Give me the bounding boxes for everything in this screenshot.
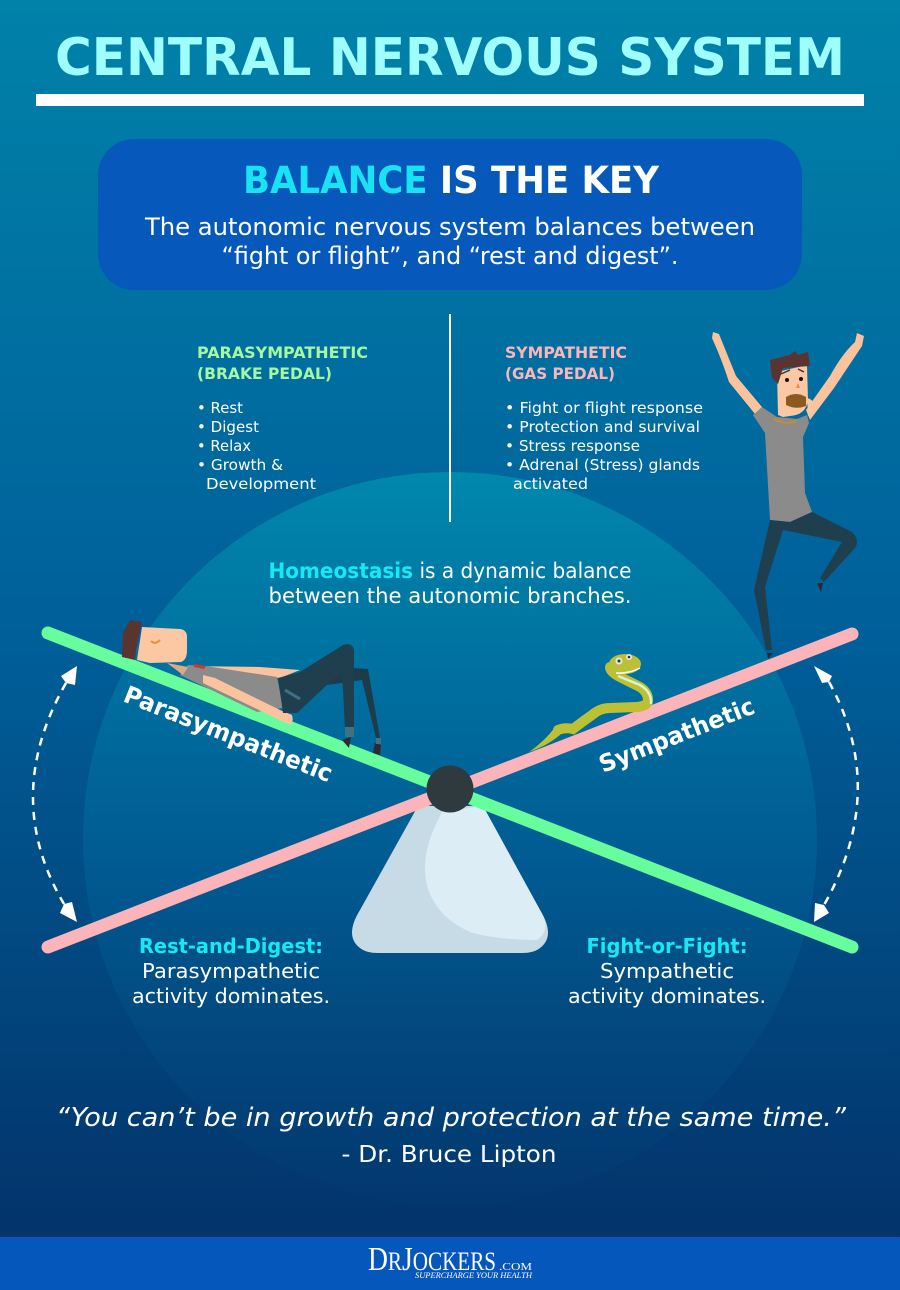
- sympathetic items: • Stress response: [505, 437, 640, 455]
- seesaw pivot: [426, 766, 474, 812]
- sympathetic items: activated: [513, 475, 588, 493]
- panel: balance is the key: [98, 139, 802, 290]
- caption: fight or fight: Sympathetic: [600, 959, 734, 983]
- sympathetic items: [505, 399, 703, 493]
- sympathetic items: • Protection and survival: [505, 418, 700, 436]
- panel text: “fight or flight”, and “rest and digest”.: [222, 242, 678, 270]
- beam: green parasympathetic: [48, 633, 852, 947]
- icon: snake: [529, 654, 651, 752]
- sympathetic heading: [505, 343, 627, 383]
- beam: pink sympathetic: [48, 634, 852, 947]
- center divider: [449, 314, 451, 522]
- sympathetic heading: SYMPATHETIC: [505, 343, 627, 362]
- sympathetic items: • Fight or flight response: [505, 399, 703, 417]
- parasympathetic items: • Digest: [197, 418, 259, 436]
- caption: rest and digest: Parasympathetic: [142, 959, 320, 983]
- homeostasis text: [268, 559, 632, 609]
- title underline: [36, 94, 864, 106]
- icon: scared man: [712, 332, 864, 659]
- beam label: sympathetic: Sympathetic: [595, 692, 759, 779]
- footer logo: .COM: [499, 1261, 532, 1273]
- parasympathetic items: • Rest: [197, 399, 243, 417]
- background circle: [83, 472, 817, 1206]
- parasympathetic items: Development: [206, 475, 316, 493]
- parasympathetic list: [197, 343, 368, 493]
- homeostasis text: Homeostasis is a dynamic balance: [268, 559, 632, 584]
- panel heading: BALANCE IS THE KEY: [243, 159, 660, 202]
- caption: fight or fight: activity dominates.: [568, 984, 766, 1008]
- panel text: The autonomic nervous system balances between: [144, 213, 755, 241]
- parasympathetic heading: PARASYMPATHETIC: [197, 343, 368, 362]
- sympathetic list: [505, 343, 703, 493]
- caption: rest and digest: [132, 934, 330, 1008]
- parasympathetic heading: [197, 343, 368, 383]
- sympathetic items: • Adrenal (Stress) glands: [505, 456, 700, 474]
- parasympathetic items: • Growth &: [197, 456, 283, 474]
- sympathetic heading: (GAS PEDAL): [505, 364, 615, 383]
- beam label: parasympathetic: Parasympathetic: [120, 681, 337, 788]
- caption: fight or fight: [568, 934, 766, 1008]
- caption: rest and digest: Rest-and-Digest:: [139, 934, 323, 958]
- parasympathetic items: [197, 399, 316, 493]
- quote: “You can’t be in growth and protection at the same time.”: [56, 1103, 847, 1133]
- arrow: left swing: [33, 666, 77, 922]
- title: CENTRAL NERVOUS SYSTEM: [55, 28, 845, 88]
- footer band: [0, 1237, 900, 1290]
- panel text: [144, 213, 755, 270]
- seesaw base: [352, 806, 548, 953]
- footer logo: SUPERCHARGE YOUR HEALTH: [415, 1270, 533, 1280]
- arrow: right swing: [814, 666, 858, 922]
- icon: sleeping man: [122, 620, 381, 755]
- footer logo: DRJOCKERS: [368, 1241, 496, 1278]
- homeostasis text: between the autonomic branches.: [268, 584, 632, 609]
- quote attribution: - Dr. Bruce Lipton: [342, 1142, 556, 1168]
- parasympathetic heading: (BRAKE PEDAL): [197, 364, 332, 383]
- quote: [56, 1103, 847, 1168]
- parasympathetic items: • Relax: [197, 437, 251, 455]
- caption: fight or fight: Fight-or-Fight:: [586, 934, 748, 958]
- caption: rest and digest: activity dominates.: [132, 984, 330, 1008]
